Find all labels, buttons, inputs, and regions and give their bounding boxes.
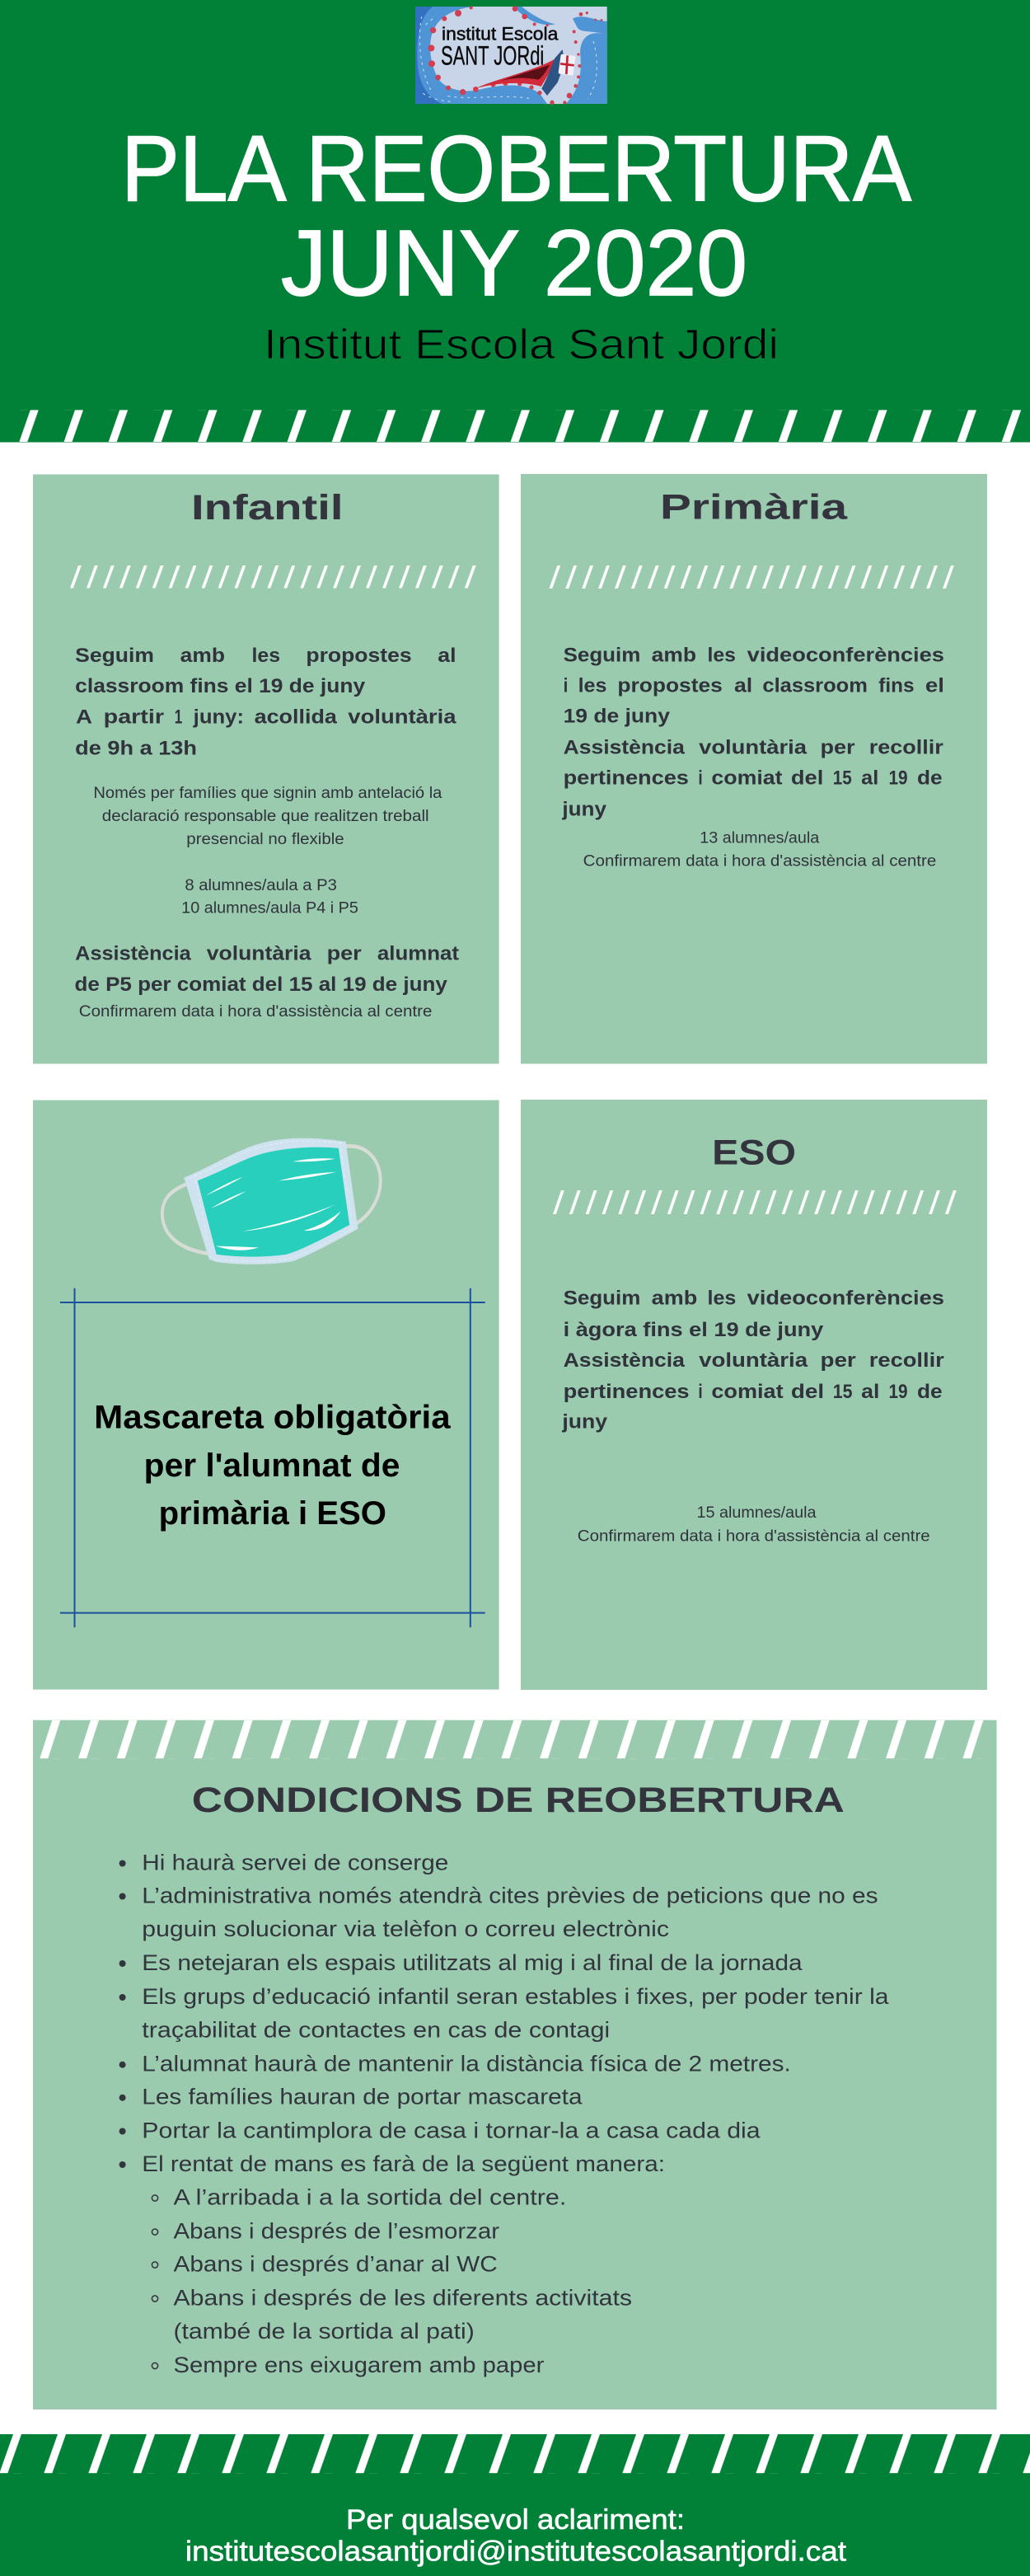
sub-list: rentat de mans: Abans i després de l’esmorzar — [173, 2219, 499, 2244]
text block: propostes i acollida: 1 — [175, 706, 182, 728]
text block: videoconferències: fins — [878, 674, 915, 697]
text block: videoconferències: al — [734, 674, 752, 697]
text block: assistència P5: Confirmarem data i hora d'assistència al centre — [79, 1003, 432, 1021]
text block: videoconferències: videoconferències — [747, 644, 944, 666]
text block: videoconferències: 19 de juny — [564, 706, 671, 728]
text block: videoconferències: juny — [561, 798, 607, 820]
bullet list: condicions: Els grups d’educació infantil seran estables i fixes, per poder tenir la — [142, 1984, 890, 2009]
heading: Infantil: Infantil — [191, 488, 343, 528]
bullet list: condicions: L’administrativa només atendrà cites prèvies de peticions que no es — [142, 1883, 878, 1907]
text block: videoconferències i àgora: Assistència — [564, 1349, 686, 1372]
text block: videoconferències: les — [707, 644, 736, 666]
panel: Primària — [521, 474, 987, 1063]
sub-list: rentat de mans: A l’arribada i a la sortida del centre. — [173, 2184, 566, 2209]
callout: mascareta obligatòria: Mascareta obligatòria — [94, 1400, 451, 1436]
text block: videoconferències i àgora: del — [791, 1381, 824, 1403]
panel: Infantil — [33, 475, 499, 1063]
text block: videoconferències i àgora: 15 — [833, 1381, 852, 1403]
footer band — [0, 2434, 1030, 2576]
bullet list: condicions: Les famílies hauran de portar mascareta — [142, 2085, 583, 2109]
text block: videoconferències i àgora: amb — [652, 1288, 697, 1310]
panel: mascareta — [33, 1100, 499, 1690]
text block: assistència P5 — [74, 943, 459, 1021]
text block: videoconferències: voluntària — [699, 736, 808, 758]
text block: famílies — [93, 785, 442, 848]
text block: videoconferències: Assistència — [564, 736, 686, 758]
text block: videoconferències i àgora: voluntària — [699, 1349, 808, 1372]
bullet list: condicions — [119, 1850, 890, 2176]
text block: ràtio ESO — [578, 1504, 930, 1546]
school logo: institut Escola — [442, 23, 559, 44]
bullet list: condicions: Hi haurà servei de conserge — [142, 1850, 448, 1875]
text block: propostes i acollida: amb — [180, 645, 225, 667]
text block: videoconferències: i — [698, 767, 703, 790]
text block: videoconferències i àgora: comiat — [711, 1381, 784, 1403]
text block: propostes i acollida: juny: — [193, 706, 244, 728]
text block: videoconferències: i — [564, 674, 568, 697]
text block: propostes i acollida: de 9h a 13h — [75, 737, 197, 759]
text block: ràtio ESO: Confirmarem data i hora d'assistència al centre — [578, 1528, 930, 1546]
text block: propostes i acollida: voluntària — [348, 706, 456, 728]
bullet list: condicions: L’alumnat haurà de mantenir la distància física de 2 metres. — [142, 2052, 791, 2076]
text block: propostes i acollida: acollida — [255, 706, 338, 728]
text block: ràtio ESO: 15 alumnes/aula — [697, 1504, 817, 1522]
text block: videoconferències i àgora — [561, 1288, 944, 1433]
text block: videoconferències: recollir — [869, 736, 943, 758]
sub-list: rentat de mans: Abans i després de les diferents activitats — [173, 2285, 632, 2310]
callout: mascareta obligatòria: per l'alumnat de — [144, 1448, 400, 1484]
text block: ràtio Primària: 13 alumnes/aula — [700, 830, 820, 847]
heading: Primària: Primària — [660, 487, 848, 527]
text block: ràtios: 8 alumnes/aula a P3 — [185, 877, 337, 894]
sub-list: rentat de mans: Sempre ens eixugarem amb paper — [173, 2353, 544, 2377]
text block: famílies: Només per famílies que signin amb antelació la — [93, 785, 442, 802]
text block: ràtio Primària — [583, 830, 936, 870]
panel: condicions de reobertura — [33, 1720, 997, 2409]
text block: videoconferències i àgora: 19 — [888, 1381, 908, 1403]
bullet list: condicions: puguin solucionar via telèfon o correu electrònic — [142, 1917, 669, 1941]
text block: videoconferències: al — [861, 767, 878, 790]
callout: mascareta obligatòria: primària i ESO — [159, 1495, 386, 1532]
header band — [0, 0, 1030, 442]
text block: assistència P5: de P5 per comiat del 15 al 19 de juny — [74, 974, 447, 996]
text block: videoconferències i àgora: les — [707, 1288, 736, 1310]
text block: videoconferències i àgora: i àgora fins el 19 de juny — [564, 1319, 824, 1341]
text block: videoconferències: 15 — [833, 767, 852, 790]
text block: videoconferències: amb — [652, 644, 696, 666]
subtitle: Institut Escola Sant Jordi — [264, 321, 779, 368]
sub-list: rentat de mans: Abans i després d’anar al WC — [173, 2252, 498, 2277]
text block: videoconferències: de — [917, 767, 943, 790]
school logo: SANT JORdi — [441, 40, 544, 71]
text block: propostes i acollida: al — [438, 645, 456, 667]
text block: propostes i acollida: partir — [104, 706, 164, 728]
main title — [121, 117, 912, 315]
text block: assistència P5: alumnat — [377, 943, 459, 964]
footer contact text: institutescolasantjordi@institutescolasantjordi.cat — [185, 2536, 847, 2568]
icon: face mask — [162, 1138, 381, 1265]
main title: JUNY 2020 — [281, 211, 747, 315]
crop frame — [60, 1288, 485, 1627]
text block: videoconferències i àgora: Seguim — [564, 1288, 640, 1310]
panel: ESO — [521, 1100, 987, 1690]
sub-list: rentat de mans — [152, 2184, 632, 2377]
bullet list: condicions: traçabilitat de contactes en cas de contagi — [142, 2018, 610, 2043]
text block: propostes i acollida: les — [252, 645, 280, 667]
text block: videoconferències: les — [578, 674, 606, 697]
text block: videoconferències: pertinences — [564, 767, 689, 790]
text block: videoconferències i àgora: al — [861, 1381, 879, 1403]
text block: videoconferències i àgora: pertinences — [564, 1381, 690, 1403]
footer contact text: Per qualsevol aclariment: — [346, 2504, 685, 2536]
heading: ESO: ESO — [712, 1133, 796, 1172]
text block: propostes i acollida: Seguim — [75, 645, 154, 667]
text block: assistència P5: voluntària — [207, 943, 311, 964]
text block: ràtio Primària: Confirmarem data i hora d'assistència al centre — [583, 853, 936, 870]
text block: propostes i acollida — [75, 645, 456, 759]
heading: condicions de reobertura: CONDICIONS DE REOBERTURA — [192, 1781, 845, 1820]
text block: videoconferències — [561, 644, 944, 820]
sub-list: rentat de mans: (també de la sortida al pati) — [173, 2319, 475, 2344]
footer contact text — [185, 2504, 847, 2568]
text block: assistència P5: per — [327, 943, 362, 964]
text block: videoconferències i àgora: per — [821, 1349, 856, 1372]
text block: propostes i acollida: propostes — [306, 645, 412, 667]
bullet list: condicions: Es netejaran els espais utilitzats al mig i al final de la jornada — [142, 1950, 803, 1975]
bullet list: condicions: Portar la cantimplora de casa i tornar-la a casa cada dia — [142, 2119, 761, 2143]
text block: videoconferències: Seguim — [564, 644, 640, 666]
text block: ràtios: 10 alumnes/aula P4 i P5 — [181, 900, 358, 917]
text block: assistència P5: Assistència — [75, 943, 191, 964]
callout: mascareta obligatòria — [94, 1400, 451, 1532]
text block: propostes i acollida: A — [76, 706, 92, 728]
text block: videoconferències i àgora: de — [917, 1381, 943, 1403]
text block: famílies: declaració responsable que realitzen treball — [102, 808, 429, 825]
text block: videoconferències: per — [821, 736, 855, 758]
text block: videoconferències i àgora: i — [698, 1381, 703, 1403]
text block: ràtios — [181, 877, 358, 917]
text block: videoconferències: el — [925, 674, 944, 697]
text block: videoconferències: 19 — [888, 767, 908, 790]
text block: videoconferències: classroom — [762, 674, 868, 697]
text block: famílies: presencial no flexible — [186, 831, 344, 848]
text block: propostes i acollida: classroom fins el 19 de juny — [75, 675, 366, 697]
bullet list: condicions: El rentat de mans es farà de la següent manera: — [142, 2151, 665, 2176]
text block: videoconferències i àgora: recollir — [869, 1349, 944, 1372]
school logo — [415, 6, 607, 105]
text block: videoconferències i àgora: juny — [561, 1411, 608, 1433]
text block: videoconferències: propostes — [617, 674, 723, 697]
main title: PLA REOBERTURA — [121, 117, 912, 221]
text block: videoconferències: del — [791, 767, 823, 790]
text block: videoconferències: comiat — [711, 767, 783, 790]
text block: videoconferències i àgora: videoconferències — [747, 1288, 944, 1310]
